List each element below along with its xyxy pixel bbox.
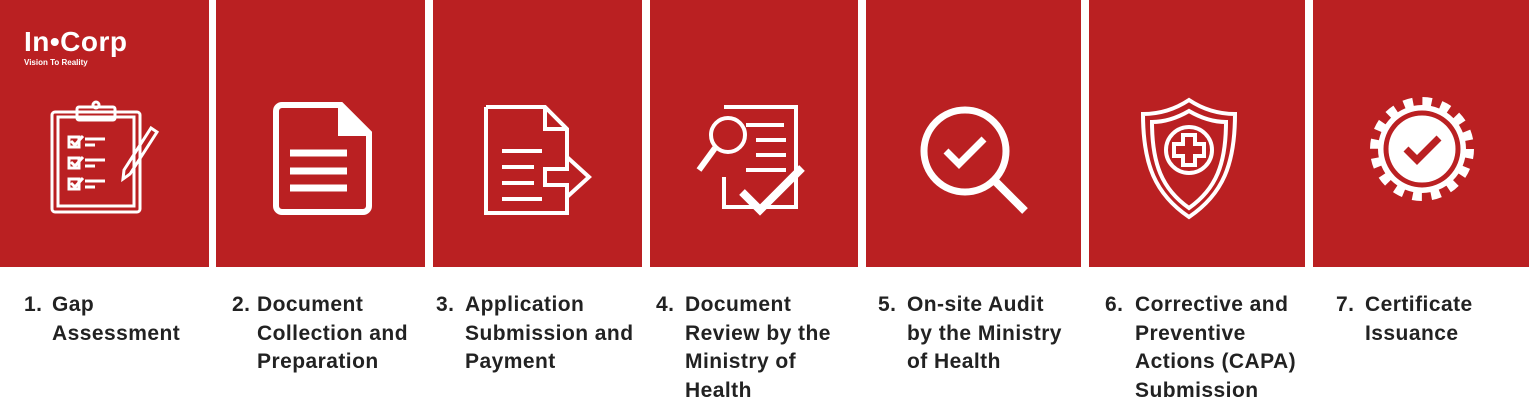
text: Preventive <box>1135 322 1246 344</box>
icon: magnifier check <box>920 106 1028 214</box>
text: Submission and <box>465 322 634 344</box>
text: Collection and <box>257 322 408 344</box>
step 3 label <box>436 293 634 373</box>
text: Document <box>257 293 363 316</box>
text: Gap <box>52 293 94 316</box>
panel 5 <box>866 0 1081 267</box>
text: 6. <box>1105 293 1123 316</box>
icon: badge check <box>1370 97 1474 201</box>
text: 3. <box>436 293 454 316</box>
step 7 label <box>1336 293 1473 344</box>
text: Health <box>685 378 752 402</box>
text: Actions (CAPA) <box>1135 350 1296 373</box>
text: Assessment <box>52 322 180 344</box>
text: Application <box>465 293 584 316</box>
text: Ministry of <box>685 350 796 373</box>
step 1 label <box>24 293 180 344</box>
text: On-site Audit <box>907 293 1044 316</box>
step 6 label <box>1105 293 1296 402</box>
text: Preparation <box>257 350 379 373</box>
text: 2. <box>232 293 250 316</box>
text: Issuance <box>1365 322 1458 344</box>
text: by the Ministry <box>907 322 1062 344</box>
panel 7 <box>1313 0 1529 267</box>
text: 4. <box>656 293 674 316</box>
text: Submission <box>1135 378 1259 402</box>
step 4 label <box>656 293 831 402</box>
text: 5. <box>878 293 896 316</box>
text: 7. <box>1336 293 1354 316</box>
text: Payment <box>465 350 556 373</box>
text: Certificate <box>1365 293 1473 316</box>
icon: shield cross <box>1141 98 1237 220</box>
icon: document review <box>696 105 805 216</box>
text: 1. <box>24 293 42 316</box>
logo: In•Corp <box>24 26 128 57</box>
text: of Health <box>907 350 1001 373</box>
panel 2 <box>216 0 425 267</box>
step 5 label <box>878 293 1062 373</box>
text: Corrective and <box>1135 293 1288 316</box>
icon: document with arrow <box>484 105 592 215</box>
panel 1 <box>0 0 209 267</box>
text: Document <box>685 293 791 316</box>
panel 3 <box>433 0 642 267</box>
panel 6 <box>1089 0 1305 267</box>
step 2 label <box>232 293 408 373</box>
panel 4 <box>650 0 858 267</box>
icon: document <box>273 102 372 215</box>
logo: Vision To Reality <box>24 58 88 67</box>
text: Review by the <box>685 322 831 344</box>
icon: clipboard <box>50 100 159 214</box>
